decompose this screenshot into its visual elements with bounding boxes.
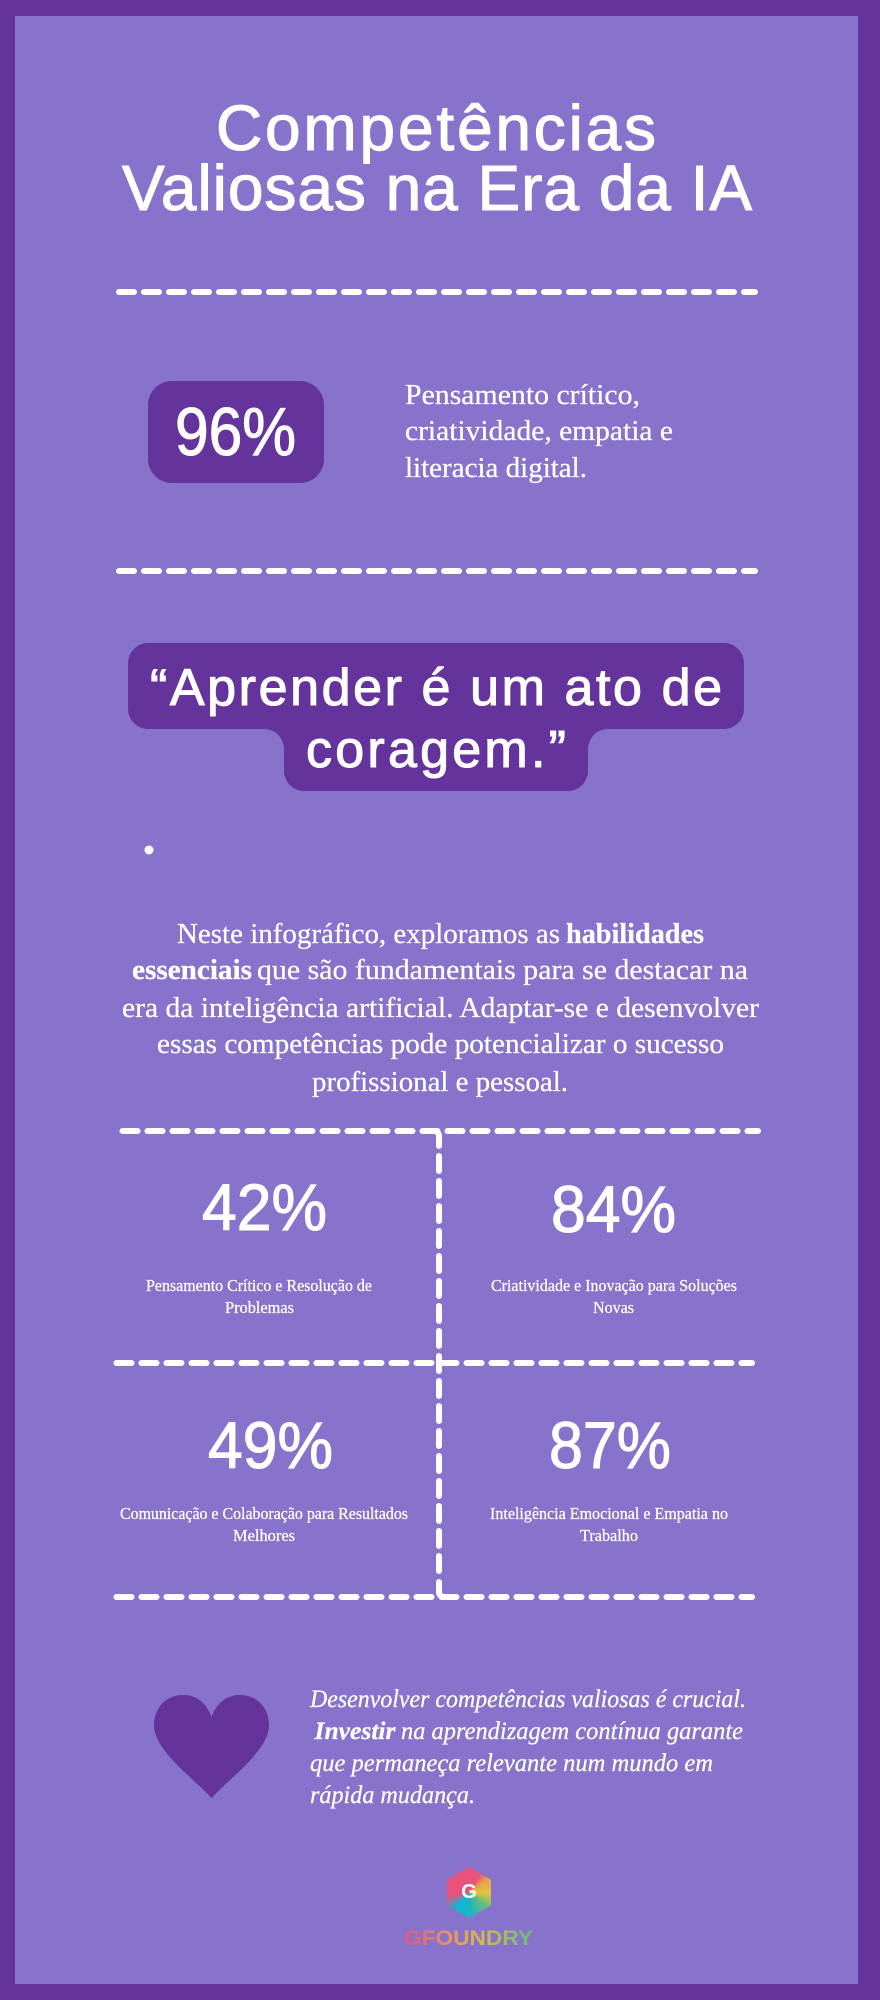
stat: 87% [490, 1408, 728, 1545]
stat: 42%: Problemas [225, 1298, 294, 1317]
intro text: profissional e pessoal. [312, 1067, 568, 1098]
logo wordmark: GFOUNDRY [404, 1927, 533, 1950]
stat description [405, 380, 673, 484]
stat: 42% [146, 1170, 372, 1317]
quote [128, 643, 744, 791]
icon: heart [154, 1695, 269, 1798]
closing text: que permaneça relevante num mundo em [310, 1748, 713, 1777]
stats grid lines [116, 1131, 758, 1597]
title: Valiosas na Era da IA [122, 152, 752, 224]
intro text [122, 919, 760, 1098]
stat: 84% [491, 1172, 737, 1317]
stat description: criatividade, empatia e [405, 416, 673, 447]
intro text: Neste infográfico, exploramos as [177, 919, 560, 950]
stat: 87%: Trabalho [580, 1526, 638, 1545]
intro text: habilidades [566, 919, 704, 950]
stat: 87%: Inteligência Emocional e Empatia no [490, 1504, 728, 1523]
bullet dot [144, 846, 154, 854]
stat description: Pensamento crítico, [405, 380, 640, 411]
logo letter: G [461, 1881, 477, 1903]
stat callout: 96% [148, 381, 324, 483]
stat callout: 96%: 96% [175, 394, 296, 470]
stat: 49%: 49% [208, 1408, 333, 1482]
stat: 49%: Melhores [233, 1526, 295, 1545]
intro text: que são fundamentais para se destacar na [257, 955, 749, 986]
intro text: essas competências pode potencializar o sucesso [157, 1029, 724, 1060]
closing text: rápida mudança. [310, 1780, 475, 1809]
closing text: Investir [313, 1716, 397, 1745]
intro text: era da inteligência artificial. Adaptar-se e desenvolver [122, 993, 760, 1024]
quote: coragem.” [306, 721, 566, 779]
closing text: Desenvolver competências valiosas é crucial. [309, 1684, 746, 1713]
closing text [309, 1684, 746, 1809]
quote: “Aprender é um ato de [150, 659, 722, 717]
title [122, 92, 752, 224]
stat: 84%: 84% [551, 1172, 676, 1246]
stat: 49%: Comunicação e Colaboração para Resultados [120, 1504, 408, 1523]
stat: 87%: 87% [549, 1408, 671, 1482]
closing text: na aprendizagem contínua garante [401, 1716, 743, 1745]
icon: logo hexagon [447, 1867, 491, 1918]
stat: 42%: Pensamento Crítico e Resolução de [146, 1276, 372, 1295]
stat: 49% [120, 1408, 408, 1545]
title: Competências [216, 92, 656, 164]
stat: 84%: Criatividade e Inovação para Soluções [491, 1276, 737, 1295]
intro text: essenciais [132, 955, 252, 986]
stat description: literacia digital. [405, 453, 587, 484]
stat: 42%: 42% [202, 1170, 327, 1244]
stat: 84%: Novas [593, 1298, 634, 1317]
